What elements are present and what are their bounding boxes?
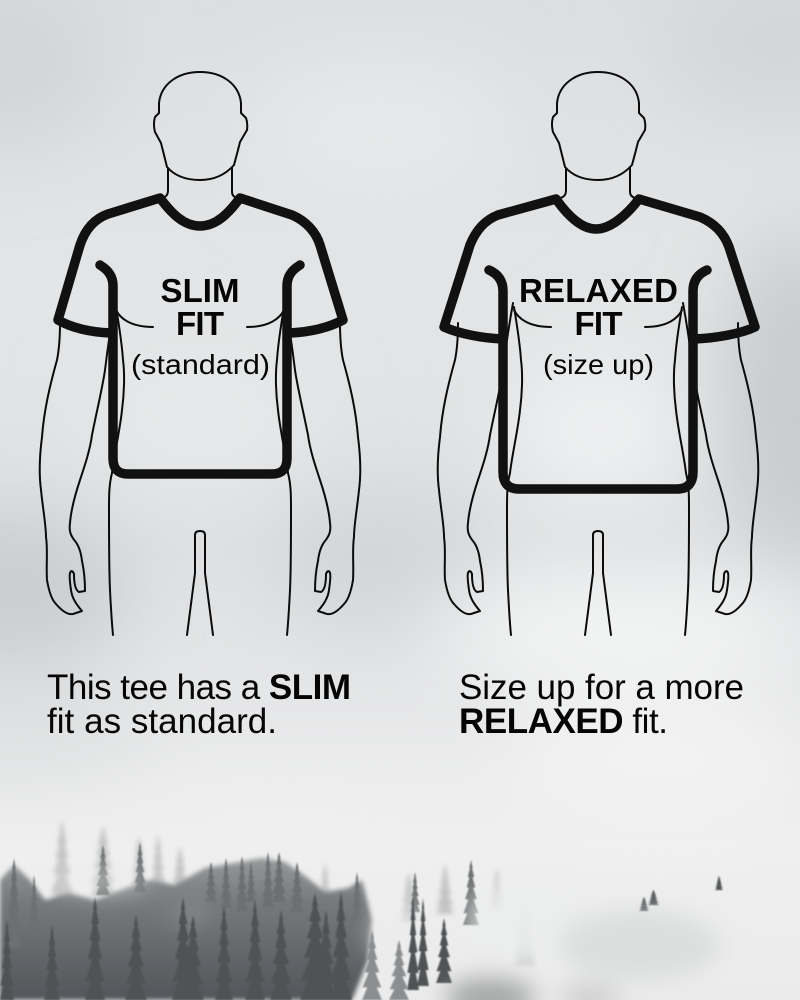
- relaxed fit label: [519, 272, 678, 380]
- caption: slim fit: [47, 668, 351, 741]
- lighter foreground trees: [362, 930, 409, 1000]
- slim t-shirt outline: [58, 198, 343, 474]
- relaxed fit label: RELAXED: [519, 272, 678, 309]
- relaxed fit label: (size up): [543, 349, 654, 380]
- body outline: [40, 72, 360, 635]
- caption: slim fit: This tee has a SLIM: [47, 668, 351, 707]
- caption: relaxed fit: [459, 668, 744, 741]
- relaxed fit label: FIT: [574, 305, 622, 342]
- ghost treetops: [50, 820, 537, 965]
- caption: relaxed fit: RELAXED fit.: [459, 702, 668, 741]
- body outline: [438, 72, 758, 635]
- dark foreground trees: [0, 876, 723, 1000]
- slim fit label: FIT: [176, 305, 224, 342]
- forest mass: [0, 858, 372, 1000]
- right figure: relaxed fit: [438, 72, 758, 635]
- relaxed t-shirt outline: [444, 199, 755, 489]
- caption: slim fit: fit as standard.: [47, 702, 277, 741]
- background: misty forest: [0, 820, 723, 1000]
- slim fit label: SLIM: [160, 272, 240, 309]
- fog between trees: [52, 868, 590, 995]
- low mist: [445, 910, 720, 1000]
- slim fit label: (standard): [131, 349, 270, 380]
- upper treetops: [6, 842, 479, 948]
- left figure: slim fit: [40, 72, 360, 635]
- slim fit label: [131, 272, 270, 380]
- caption: relaxed fit: Size up for a more: [459, 668, 744, 707]
